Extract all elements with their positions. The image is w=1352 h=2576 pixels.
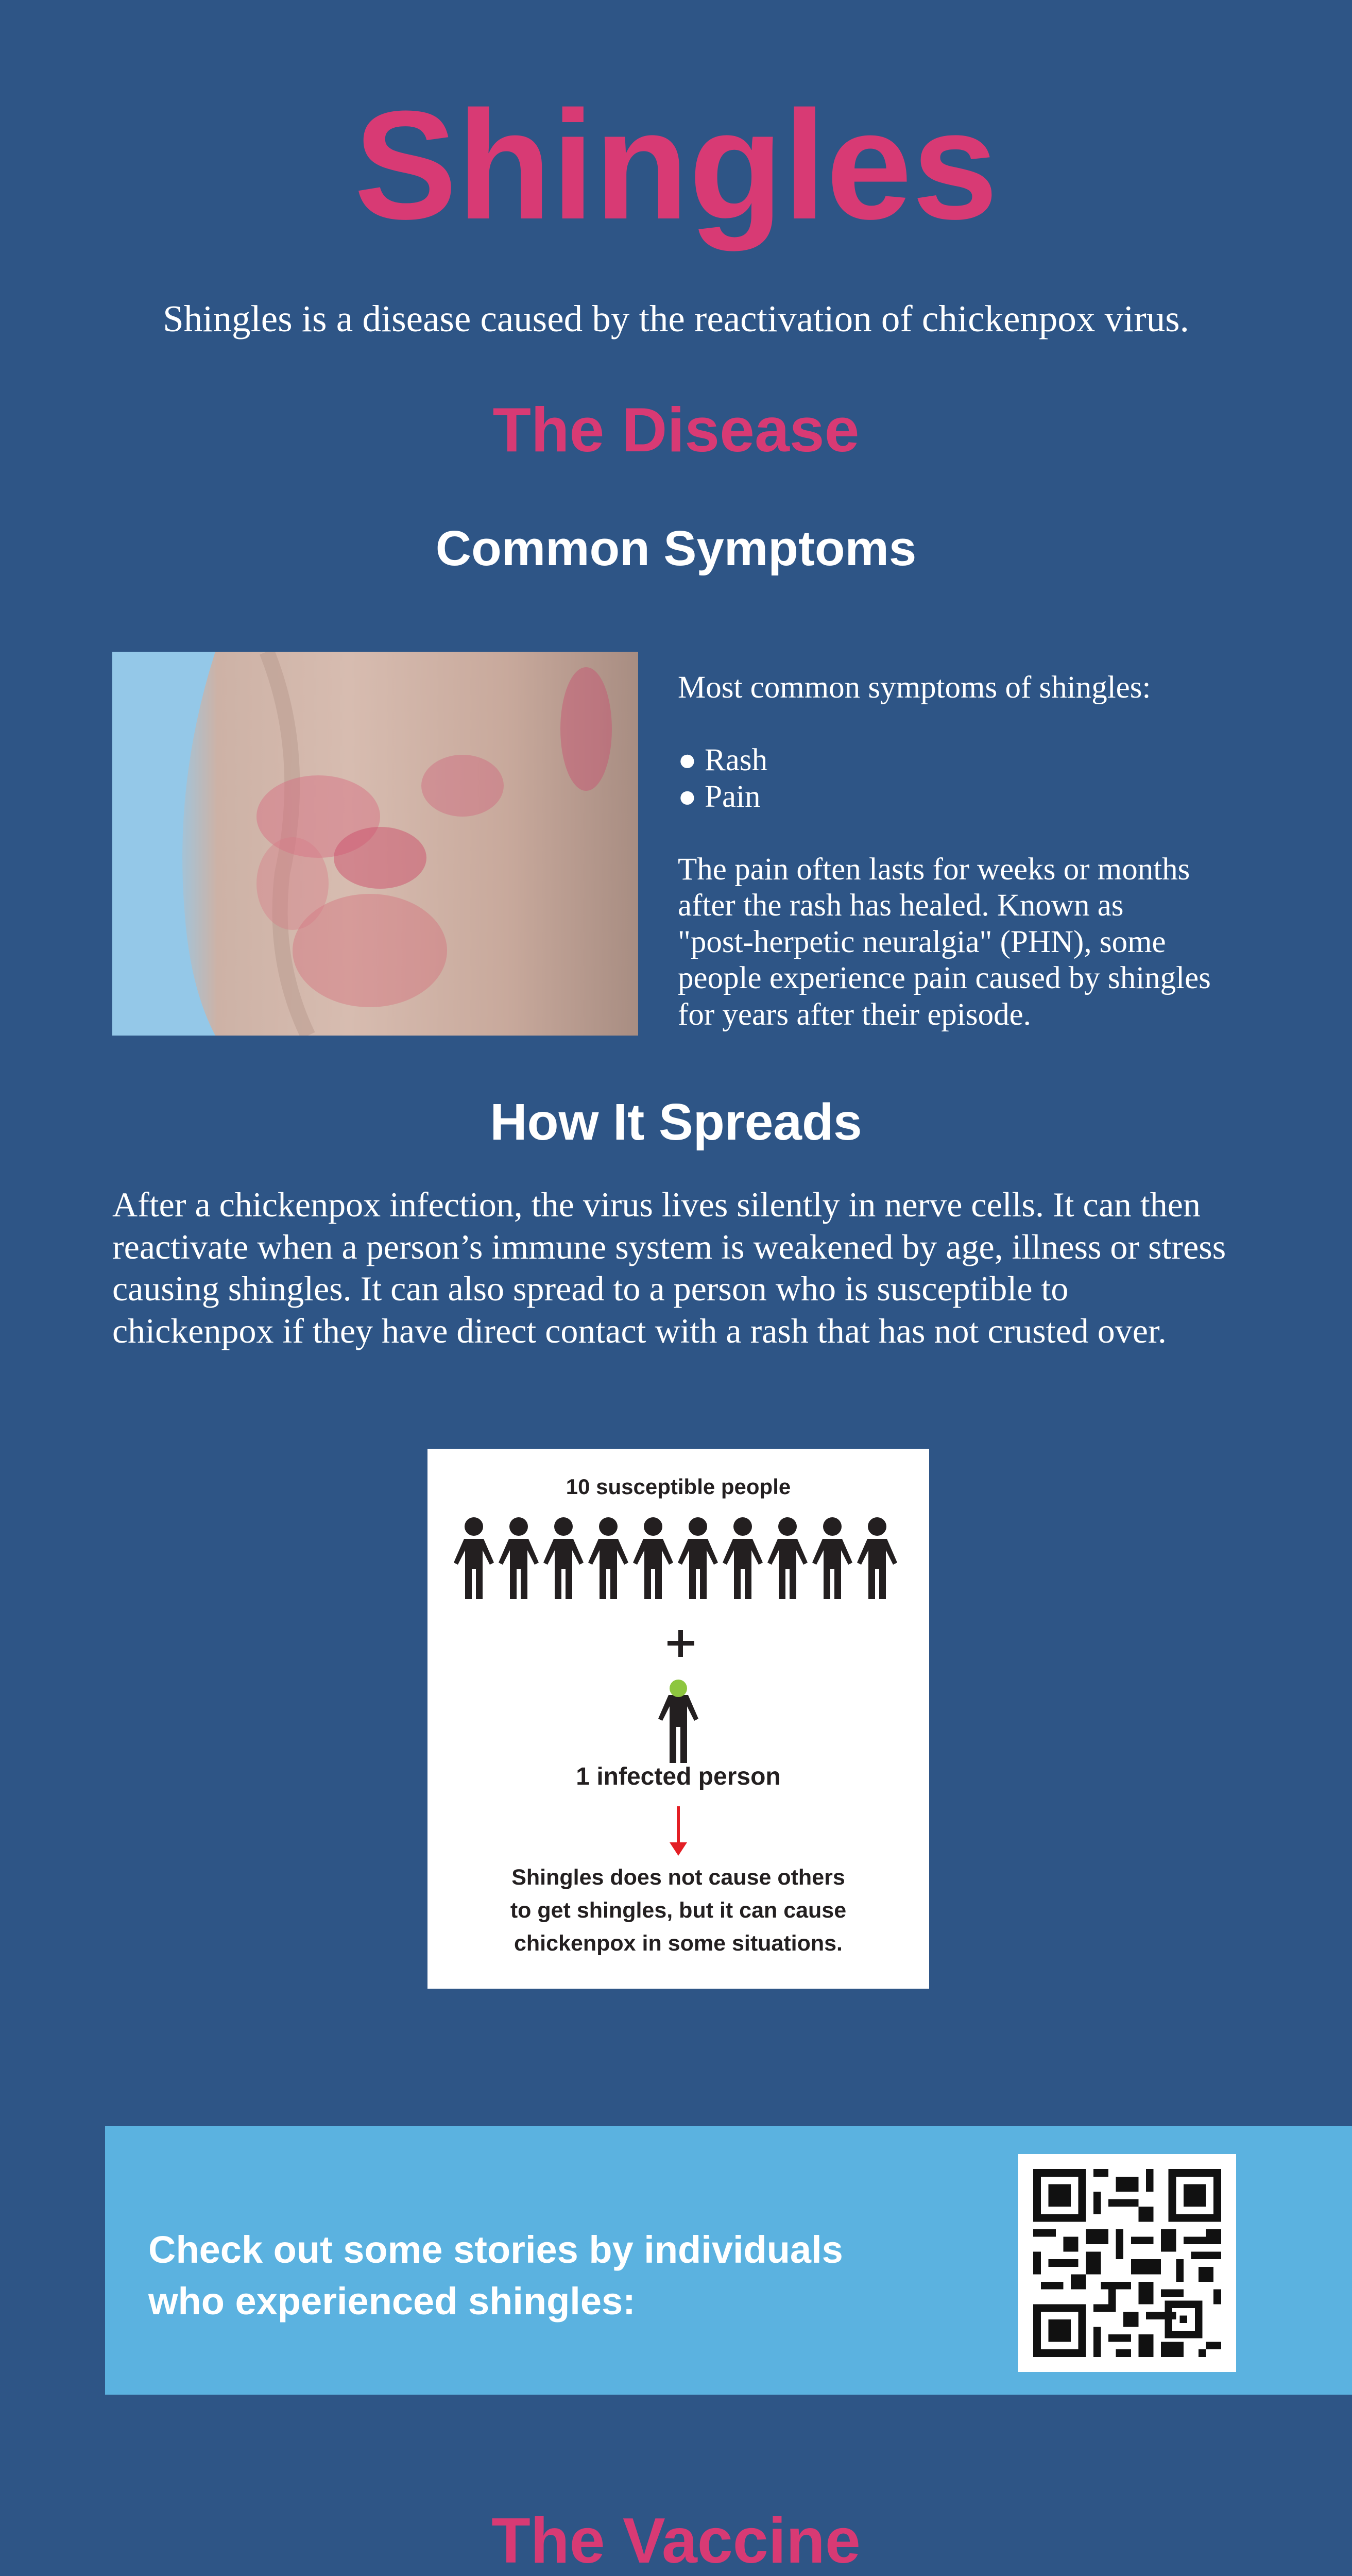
text: how it spreads: After a chickenpox infection, the virus lives silently in nerve cells. It can then [112,1185,1201,1224]
arrow: red [670,1806,687,1856]
text: symptoms list: ● Pain [678,779,761,814]
subtitle: Shingles is a disease caused by the reactivation of chickenpox virus. [163,298,1189,340]
heading: how it spreads: How It Spreads [490,1093,862,1151]
text: symptoms list: for years after their episode. [678,997,1031,1031]
callout text [148,2228,843,2323]
photo: shingles rash [112,652,638,1036]
heading: the vaccine: The Vaccine [491,2505,861,2576]
text: symptoms list: The pain often lasts for weeks or months [678,852,1190,886]
text: how it spreads: chickenpox if they have direct contact with a rash that has not crusted over. [112,1311,1167,1350]
label: infected person: 1 infected person [576,1763,781,1790]
heading: common symptoms: Common Symptoms [436,521,916,576]
callout text: who experienced shingles: [148,2280,636,2323]
text: conclusion: chickenpox in some situations. [514,1931,843,1956]
panel: stories callout [105,2126,1352,2395]
text: how it spreads: causing shingles. It can also spread to a person who is susceptible to [112,1269,1068,1308]
label: susceptible people: 10 susceptible people [566,1475,791,1499]
people row [454,1517,897,1599]
infected person icon [658,1680,698,1763]
text: conclusion: Shingles does not cause others [511,1865,845,1890]
text: how it spreads: reactivate when a person’s immune system is weakened by age, illness or stress [112,1227,1226,1266]
heading: the disease: The Disease [492,395,860,465]
plus sign [668,1630,694,1657]
text: symptoms list [678,670,1211,1031]
text: symptoms list: after the rash has healed. Known as [678,888,1124,923]
text: how it spreads [112,1185,1226,1350]
text: symptoms list: ● Rash [678,743,767,777]
icon: QR code [1018,2154,1236,2372]
text: symptoms list: people experience pain caused by shingles [678,961,1211,995]
text: symptoms list: "post-herpetic neuralgia" (PHN), some [678,924,1166,959]
text: conclusion: to get shingles, but it can cause [510,1898,846,1923]
callout text: Check out some stories by individuals [148,2228,843,2271]
text: conclusion [510,1865,846,1956]
text: symptoms list: Most common symptoms of shingles: [678,670,1151,705]
diagram: transmission [427,1449,929,1989]
title: Shingles [354,78,998,251]
